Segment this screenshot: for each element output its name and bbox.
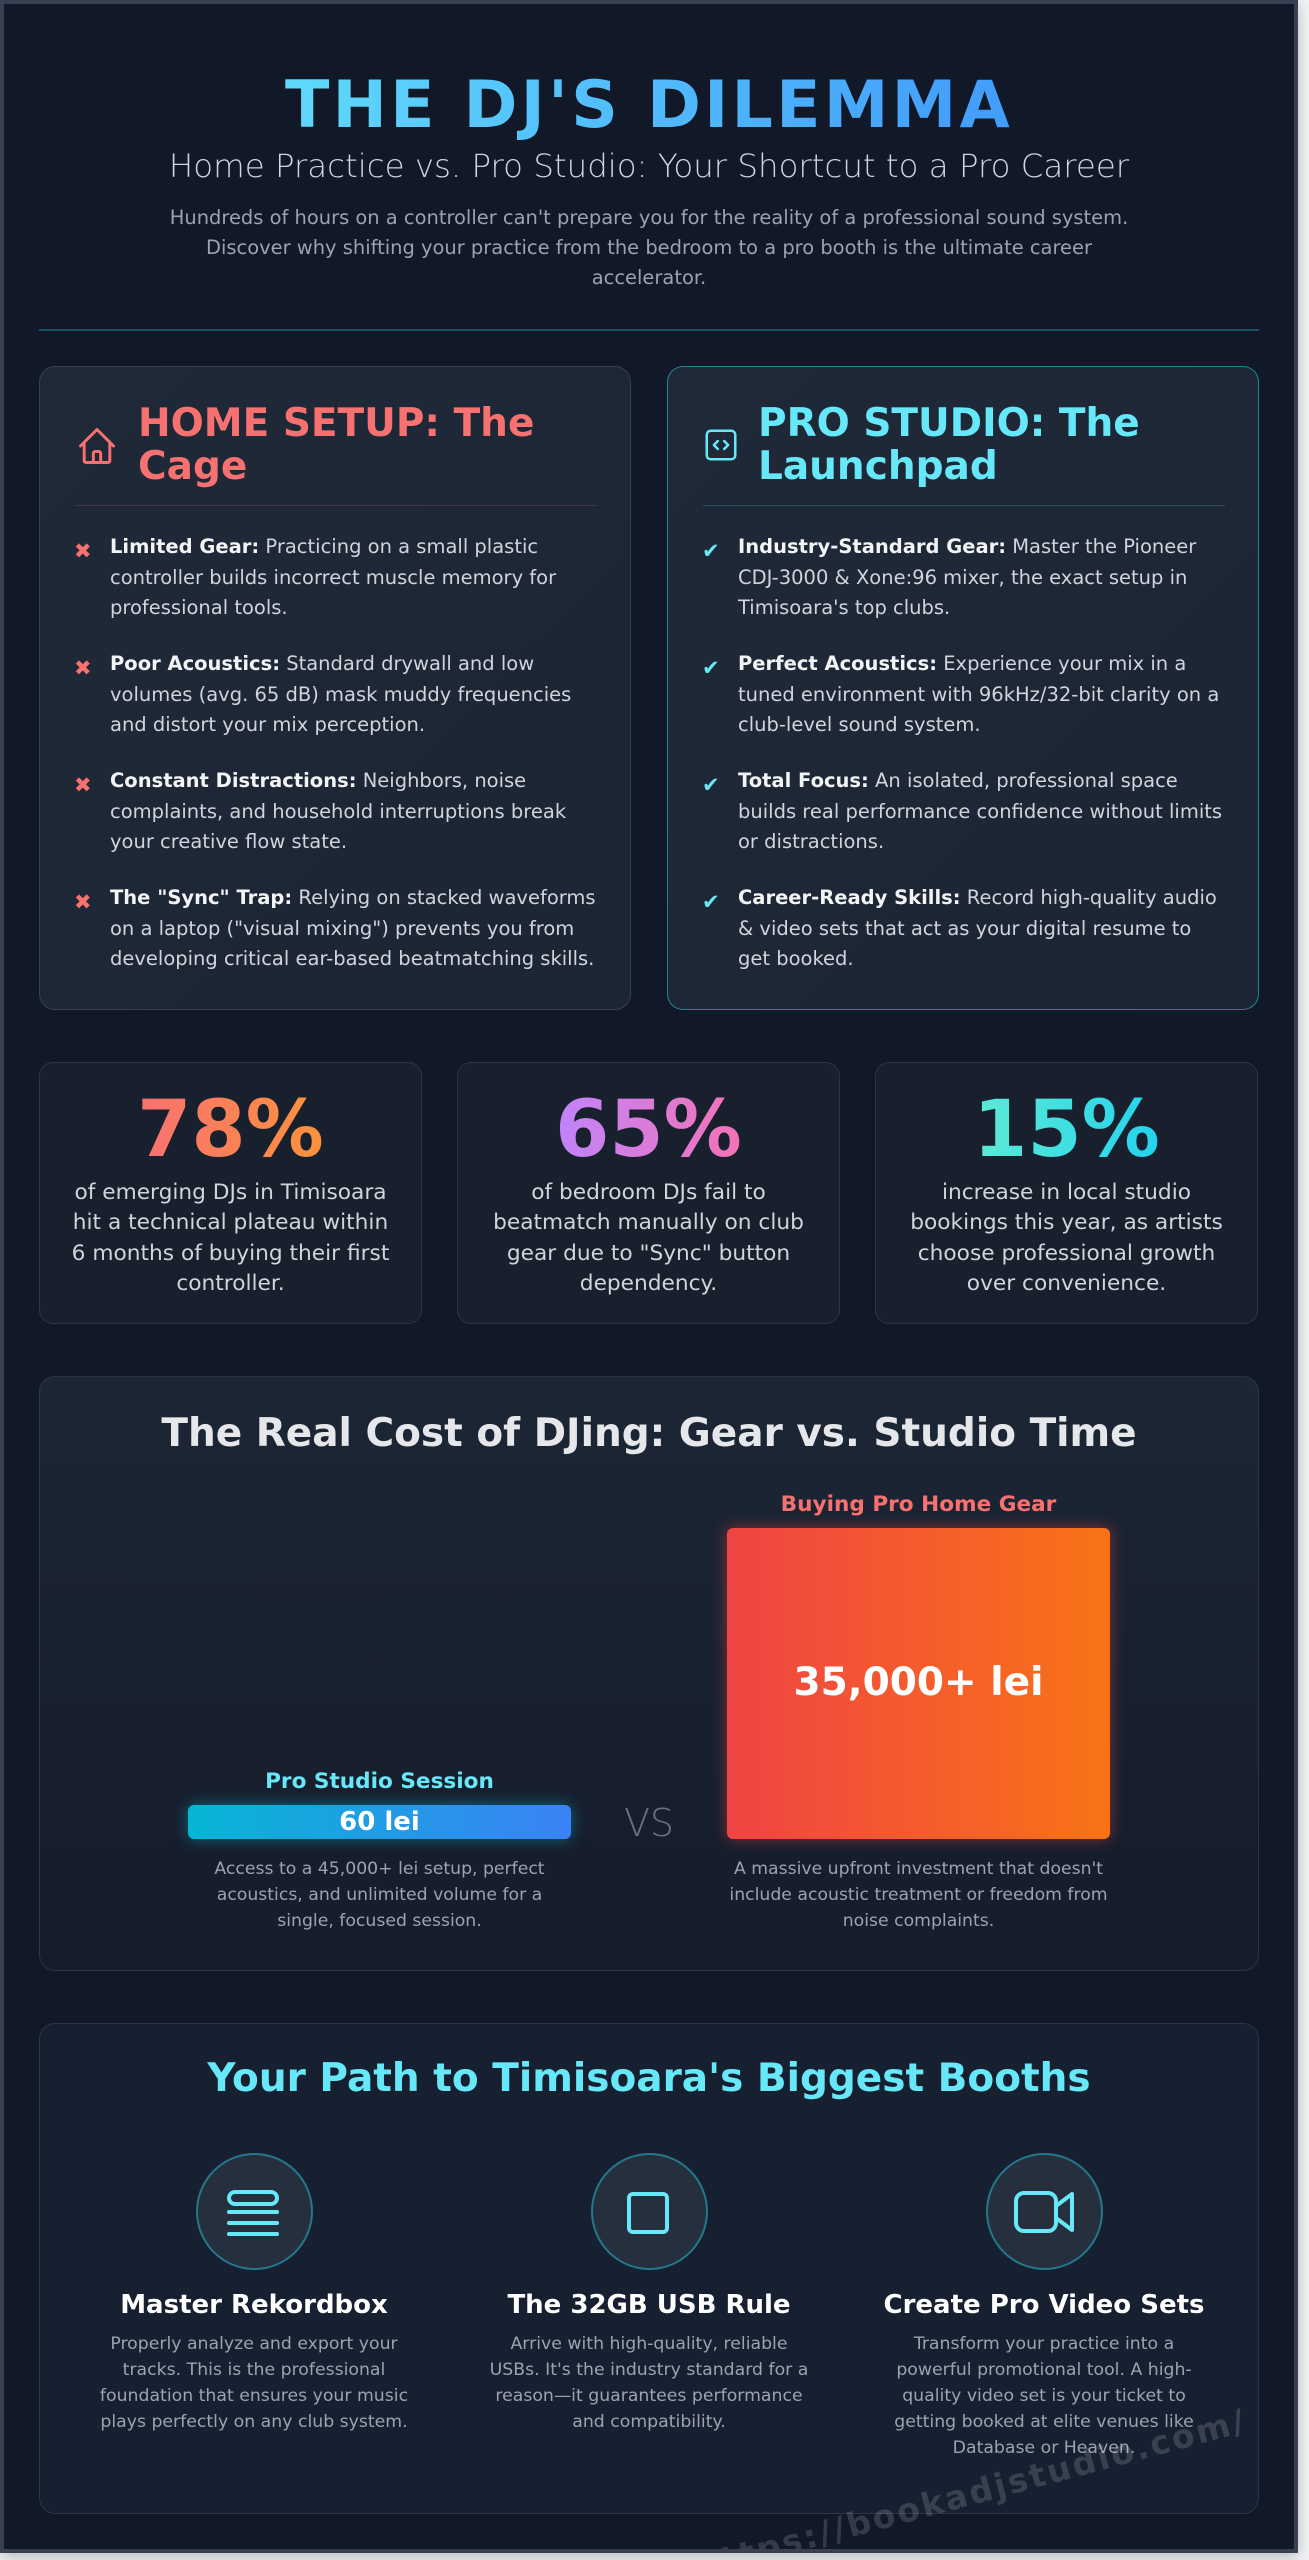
step text: video: [894, 2334, 1194, 2458]
stat card: 78%: [39, 1062, 422, 1324]
step heading: video: Create Pro Video Sets: [884, 2290, 1204, 2320]
list item: total focus: Total Focus: An isolated, professional space: [738, 769, 1178, 792]
list item: total focus: [702, 769, 1222, 853]
list item: perfect acoustics: club-level sound system.: [738, 713, 981, 736]
list item: limited gear: professional tools.: [110, 596, 288, 619]
intro paragraph: [170, 206, 1128, 289]
bar: 35,000+ lei: 35,000+ lei: [794, 1660, 1043, 1705]
step text: video: quality video set is your ticket to: [902, 2386, 1186, 2406]
icon: code chip: [706, 430, 736, 460]
list item: career-ready skills: get booked.: [738, 947, 854, 970]
step text: rekordbox: plays perfectly on any club system.: [100, 2412, 408, 2432]
number: 15%: [973, 1085, 1160, 1175]
list item: limited gear: controller builds incorrect muscle memory for: [110, 566, 556, 589]
list item: limited gear: [74, 535, 556, 619]
description: [72, 1180, 389, 1296]
icon: house: [79, 428, 115, 464]
list item: perfect acoustics: ✔: [702, 656, 720, 680]
number: 78%: [137, 1085, 324, 1175]
step text: rekordbox: [100, 2334, 408, 2432]
description: of bedroom DJs fail to: [531, 1180, 766, 1205]
heading: home setup: HOME SETUP: The: [138, 401, 534, 446]
caption: [729, 1859, 1108, 1931]
description: beatmatch manually on club: [493, 1210, 804, 1235]
list item: industry gear: [702, 535, 1196, 619]
list item: career-ready skills: Career-Ready Skills: Record high-quality audio: [738, 886, 1217, 909]
caption: single, focused session.: [277, 1911, 482, 1931]
list item: poor acoustics: ✖: [74, 656, 92, 680]
cost column: home gear: [717, 1492, 1120, 1931]
stat card: 15%: [875, 1062, 1258, 1324]
heading: cost comparison: The Real Cost of DJing: Gear vs. Studio Time: [161, 1411, 1137, 1456]
step text: rekordbox: tracks. This is the professional: [123, 2360, 385, 2380]
step text: rekordbox: foundation that ensures your music: [100, 2386, 408, 2406]
list item: total focus: builds real performance confidence without limits: [738, 800, 1222, 823]
description: increase in local studio: [942, 1180, 1191, 1205]
header block: [39, 68, 1259, 331]
list item: sync trap: on a laptop ("visual mixing") prevents you from: [110, 917, 574, 940]
vs label: VS: [624, 1801, 674, 1845]
list item: sync trap: [74, 886, 596, 970]
description: dependency.: [580, 1271, 717, 1296]
number: 65%: [555, 1085, 742, 1175]
description: controller.: [176, 1271, 285, 1296]
label: Pro Studio Session: [265, 1769, 494, 1794]
list item: constant distractions: your creative flow state.: [110, 830, 347, 853]
list item: constant distractions: complaints, and household interruptions break: [110, 800, 566, 823]
description: hit a technical plateau within: [73, 1210, 388, 1235]
step text: video: Transform your practice into a: [914, 2334, 1174, 2354]
caption: Access to a 45,000+ lei setup, perfect: [214, 1859, 545, 1879]
description: of emerging DJs in Timisoara: [74, 1180, 387, 1205]
heading: home setup: Cage: [138, 444, 247, 489]
step text: usb: reason—it guarantees performance: [495, 2386, 803, 2406]
caption: include acoustic treatment or freedom from: [729, 1885, 1108, 1905]
step text: video: Database or Heaven.: [953, 2438, 1135, 2458]
description: gear due to "Sync" button: [507, 1241, 790, 1266]
list item: sync trap: The "Sync" Trap: Relying on stacked waveforms: [110, 886, 596, 909]
step icon: video: [986, 2153, 1103, 2270]
list item: poor acoustics: Poor Acoustics: Standard drywall and low: [110, 652, 534, 675]
stat card: 65%: [457, 1062, 840, 1324]
caption: [214, 1859, 545, 1931]
list item: perfect acoustics: tuned environment with 96kHz/32-bit clarity on a: [738, 683, 1219, 706]
list item: career-ready skills: [702, 886, 1217, 970]
cost column: pro studio session: [179, 1769, 580, 1931]
heading: home setup: [138, 401, 534, 489]
list item: industry gear: CDJ-3000 & Xone:96 mixer, the exact setup in: [738, 566, 1187, 589]
heading: path to booths: Your Path to Timisoara's Biggest Booths: [207, 2056, 1091, 2101]
caption: noise complaints.: [843, 1911, 994, 1931]
title: THE DJ'S DILEMMA: [285, 68, 1013, 143]
panel: home setup: [39, 366, 631, 1010]
step text: video: powerful promotional tool. A high-: [896, 2360, 1192, 2380]
panel: path to booths: [39, 2023, 1259, 2514]
bar: 60 lei: [188, 1805, 571, 1839]
list item: sync trap: ✖: [74, 890, 92, 914]
intro paragraph: Discover why shifting your practice from the bedroom to a pro booth is the ultimate career: [206, 236, 1092, 259]
list item: limited gear: ✖: [74, 539, 92, 563]
list item: perfect acoustics: [702, 652, 1219, 736]
list item: poor acoustics: volumes (avg. 65 dB) mask muddy frequencies: [110, 683, 571, 706]
list item: sync trap: developing critical ear-based beatmatching skills.: [110, 947, 594, 970]
list item: constant distractions: ✖: [74, 773, 92, 797]
list item: career-ready skills: & video sets that act as your digital resume to: [738, 917, 1191, 940]
list item: poor acoustics: [74, 652, 571, 736]
description: [493, 1180, 804, 1296]
subtitle: Home Practice vs. Pro Studio: Your Shortcut to a Pro Career: [169, 147, 1129, 185]
caption: A massive upfront investment that doesn't: [734, 1859, 1103, 1879]
intro paragraph: Hundreds of hours on a controller can't prepare you for the reality of a professional sound system.: [170, 206, 1128, 229]
list item: industry gear: Industry-Standard Gear: Master the Pioneer: [738, 535, 1196, 558]
description: bookings this year, as artists: [910, 1210, 1223, 1235]
step text: usb: USBs. It's the industry standard for a: [490, 2360, 808, 2380]
label: Buying Pro Home Gear: [781, 1492, 1056, 1517]
list item: career-ready skills: ✔: [702, 890, 720, 914]
list item: perfect acoustics: Perfect Acoustics: Experience your mix in a: [738, 652, 1186, 675]
heading: pro studio: PRO STUDIO: The: [758, 401, 1140, 446]
list item: total focus: or distractions.: [738, 830, 884, 853]
heading: pro studio: [758, 401, 1140, 489]
step text: usb: Arrive with high-quality, reliable: [510, 2334, 788, 2354]
description: choose professional growth: [918, 1241, 1215, 1266]
step heading: usb: The 32GB USB Rule: [507, 2290, 791, 2320]
bar: 60 lei: 60 lei: [339, 1807, 420, 1837]
list item: constant distractions: [74, 769, 566, 853]
panel: pro studio: [667, 366, 1259, 1010]
heading: pro studio: Launchpad: [758, 444, 998, 489]
description: 6 months of buying their first: [72, 1241, 389, 1266]
step text: video: getting booked at elite venues like: [894, 2412, 1194, 2432]
bar: 35,000+ lei: [727, 1528, 1110, 1839]
step icon: rekordbox: [196, 2153, 313, 2270]
intro paragraph: accelerator.: [592, 266, 706, 289]
step text: rekordbox: Properly analyze and export your: [110, 2334, 398, 2354]
caption: acoustics, and unlimited volume for a: [217, 1885, 542, 1905]
panel: cost comparison: [39, 1376, 1259, 1971]
list item: industry gear: ✔: [702, 539, 720, 563]
step heading: rekordbox: Master Rekordbox: [120, 2290, 388, 2320]
list item: limited gear: Limited Gear: Practicing on a small plastic: [110, 535, 538, 558]
list item: constant distractions: Constant Distractions: Neighbors, noise: [110, 769, 526, 792]
list item: industry gear: Timisoara's top clubs.: [738, 596, 950, 619]
list item: total focus: ✔: [702, 773, 720, 797]
description: [910, 1180, 1223, 1296]
list item: poor acoustics: and distort your mix perception.: [110, 713, 425, 736]
description: over convenience.: [967, 1271, 1166, 1296]
step icon: usb: [591, 2153, 708, 2270]
step text: usb: [490, 2334, 808, 2432]
step text: usb: and compatibility.: [572, 2412, 726, 2432]
